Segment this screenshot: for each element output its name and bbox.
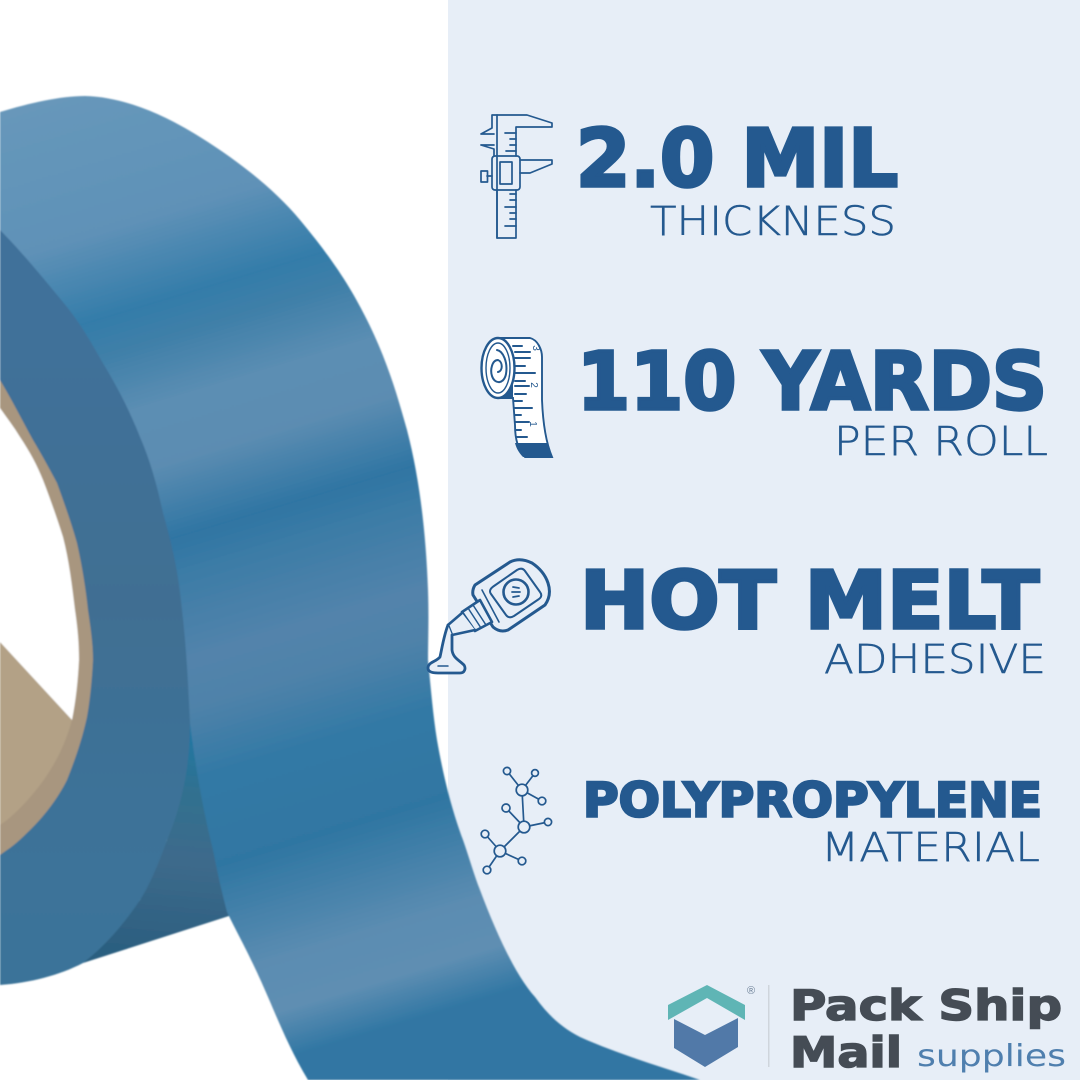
panel: specifications background (448, 0, 1080, 1080)
icon: caliper (481, 115, 552, 238)
cardboard core inner face (0, 642, 72, 825)
label: thickness: THICKNESS (650, 199, 896, 245)
roll hole (0, 408, 79, 720)
logo divider (768, 985, 770, 1067)
logo mark box (674, 1018, 738, 1067)
logo mark roof (668, 985, 745, 1020)
heading: HOT MELT: HOT MELT (580, 555, 1039, 647)
logo supplies text: supplies (917, 1039, 1066, 1074)
logo wordmark line 2: Mail (790, 1028, 902, 1077)
icon: tape measure: 1 (527, 421, 538, 427)
heading: 2.0 MIL: 2.0 MIL (576, 113, 898, 205)
tape strip unrolling (0, 96, 700, 1080)
icon: molecule (481, 767, 552, 874)
spec: adhesive (428, 555, 1046, 683)
icon: tape measure: 2 (528, 382, 539, 388)
spec: thickness (481, 113, 898, 245)
logo wordmark line 1: Pack Ship (790, 981, 1062, 1030)
icon: tape measure (482, 338, 552, 457)
registered mark: ® (747, 985, 755, 997)
spec: material (481, 767, 1042, 874)
label: per roll: PER ROLL (834, 419, 1048, 465)
spec: length (482, 336, 1048, 465)
icon: glue bottle (428, 560, 549, 673)
heading: 110 YARDS: 110 YARDS (577, 336, 1047, 428)
tape roll side (0, 222, 197, 985)
icon: tape measure: 3 (530, 345, 541, 351)
label: material: MATERIAL (821, 825, 1040, 871)
label: adhesive: ADHESIVE (824, 637, 1046, 683)
cardboard core rim (0, 380, 93, 855)
heading: POLYPROPYLENE: POLYPROPYLENE (583, 774, 1042, 828)
product photo: blue tape roll (0, 96, 700, 1080)
tape under layer (83, 715, 232, 963)
logo: Pack Ship Mail supplies (668, 981, 1066, 1077)
